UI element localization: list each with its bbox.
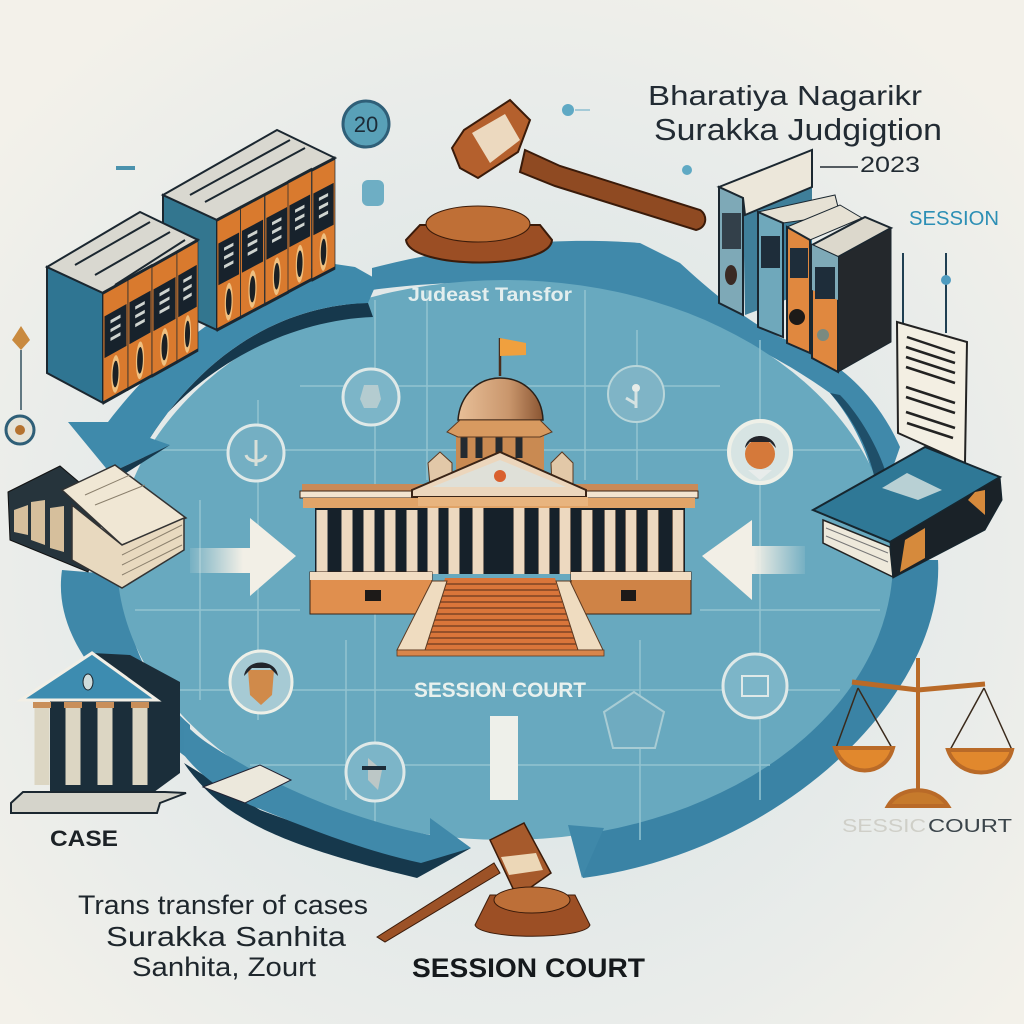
icon: small paper (203, 765, 291, 803)
icon: left open book (8, 465, 186, 588)
icon: circle left (228, 425, 284, 481)
arrow: upper right ring (372, 241, 900, 490)
label: court right: SESSIC (842, 816, 926, 836)
arrow: left inner white (190, 518, 296, 596)
arrow: upper right inner shadow (830, 393, 885, 480)
gavel head (452, 100, 530, 178)
gavel base (406, 206, 552, 262)
panel: central ellipse (117, 280, 893, 840)
icon: portrait bottom (346, 743, 404, 801)
eaves (447, 420, 552, 437)
icon: small courthouse left (11, 653, 186, 813)
icon: scales (835, 658, 1012, 806)
icon: right books (719, 150, 891, 372)
icon: document (897, 253, 967, 463)
heading: Bharatiya Nagarikr (648, 80, 922, 111)
icon: circle upper right (608, 366, 664, 422)
icon: courthouse (300, 338, 698, 656)
label: session top right: SESSION (909, 208, 999, 230)
label: court right: COURT (928, 816, 1012, 836)
text block: transfer of cases: Surakka Sanhita (106, 921, 346, 952)
icon: left pin (6, 326, 34, 444)
icon: top medallion (343, 101, 389, 206)
drum (456, 434, 544, 472)
dome (458, 378, 543, 420)
icon: small gavel bottom (377, 823, 590, 942)
icon: large gavel top (406, 100, 705, 262)
text block: transfer of cases (78, 890, 368, 982)
heading: Surakka Judgigtion (654, 112, 942, 147)
label: judicial transfer: Judeast Tansfor (408, 285, 573, 306)
label: case: CASE (50, 826, 118, 851)
heading: 2023 (860, 152, 920, 177)
roof (300, 484, 698, 508)
label: court right (842, 816, 1012, 836)
icon: portrait right (729, 421, 791, 483)
gavel band (472, 114, 520, 163)
icon: left front books (47, 212, 198, 403)
icon: portrait left (230, 651, 292, 713)
flag (500, 338, 526, 376)
icon: left back books (163, 130, 335, 330)
icon: top connector marks (116, 104, 692, 175)
icon: medallions (228, 101, 791, 801)
icon: top medallion: 20 (354, 112, 378, 137)
text block: transfer of cases: Trans transfer of cases (78, 890, 368, 920)
base (310, 572, 691, 614)
pediment (412, 452, 588, 506)
heading (648, 80, 942, 177)
arrow: lower left ring (184, 723, 471, 878)
icon: circle upper left (343, 369, 399, 425)
stairs (397, 578, 604, 656)
colonnade (315, 508, 685, 574)
arrow: lower right head (568, 825, 604, 878)
arrow: right inner white (702, 520, 805, 600)
arrow: right lower ring (570, 560, 938, 878)
arrow: upper left ring (68, 263, 378, 482)
icon: emblem (604, 692, 664, 748)
label: session court center: SESSION COURT (414, 679, 586, 702)
arrow: left lower ring arc (61, 570, 190, 760)
text block: transfer of cases: Sanhita, Zourt (132, 952, 317, 982)
label: session court bottom: SESSION COURT (412, 953, 646, 983)
icon: circle right lower (723, 654, 787, 718)
gavel handle (520, 150, 705, 230)
icon: right book (813, 447, 1002, 578)
turrets (428, 452, 573, 485)
arrow: bottom white bar (490, 716, 518, 800)
